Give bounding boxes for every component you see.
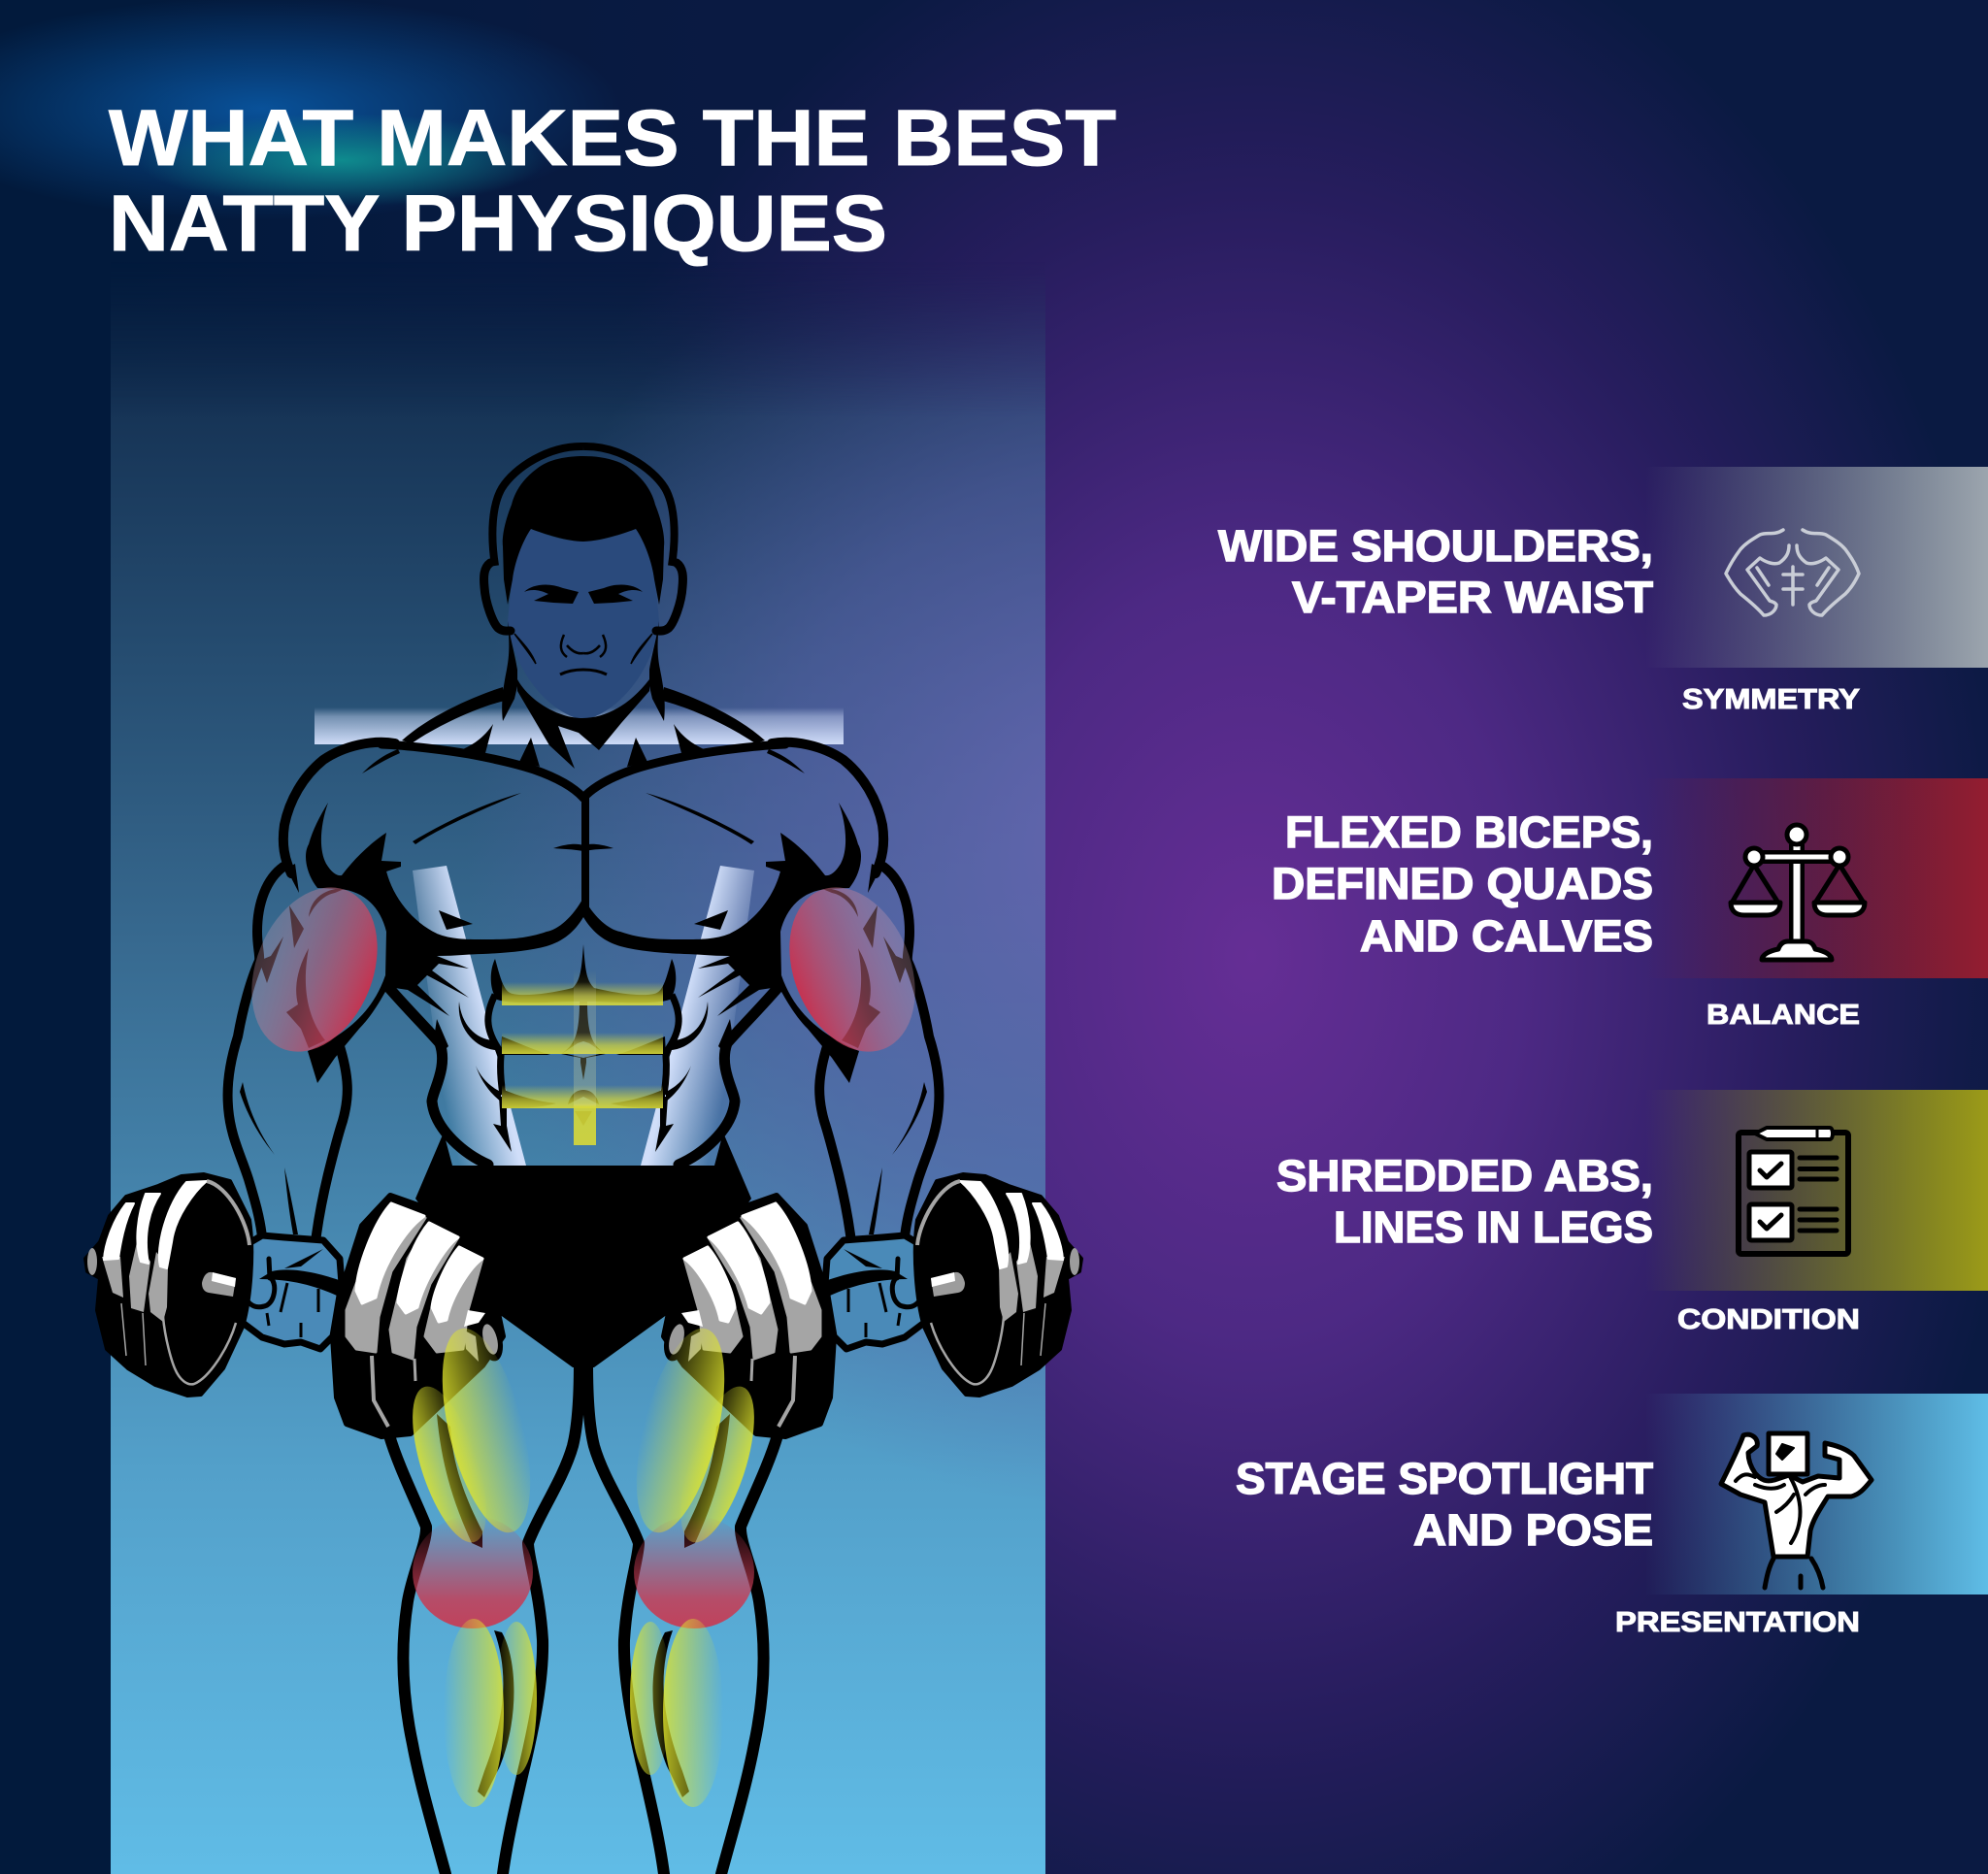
label: condition: CONDITION — [1677, 1304, 1860, 1335]
pecs, armpit and lat mass — [240, 793, 583, 1234]
highlight: biceps left — [228, 869, 401, 1070]
shorts — [415, 1133, 583, 1367]
icon: flexing bodybuilder — [1721, 1433, 1872, 1588]
highlight: biceps right — [766, 869, 939, 1070]
text: stage spotlight: AND POSE — [1413, 1505, 1653, 1555]
leg outlines — [389, 1364, 580, 1874]
facial features — [514, 585, 583, 674]
text: stage spotlight — [1236, 1454, 1653, 1555]
label: presentation: PRESENTATION — [1615, 1607, 1860, 1638]
text: flexed biceps: AND CALVES — [1360, 911, 1653, 961]
figure: bodybuilder with dumbbells — [85, 446, 1081, 1874]
text: flexed biceps: FLEXED BICEPS, — [1285, 807, 1653, 857]
panel: figure backdrop — [111, 262, 1045, 1874]
text: wide shoulders — [1218, 521, 1653, 622]
outer weight plates — [85, 1174, 251, 1396]
ear — [484, 563, 511, 631]
text: flexed biceps: DEFINED QUADS — [1272, 859, 1653, 908]
label: symmetry: SYMMETRY — [1682, 684, 1860, 715]
band: presentation — [1645, 1394, 1988, 1595]
text: stage spotlight: STAGE SPOTLIGHT — [1236, 1454, 1653, 1503]
face fill — [508, 529, 583, 720]
highlight: calves — [444, 1619, 723, 1807]
highlight: shoulder width bar — [315, 707, 844, 744]
highlight: v-taper waist stripes — [413, 866, 754, 1166]
text: flexed biceps — [1272, 807, 1653, 961]
title glow — [0, 0, 621, 220]
neck and traps — [362, 621, 540, 773]
icon: checklist clipboard — [1739, 1128, 1848, 1254]
label: balance: BALANCE — [1706, 1000, 1860, 1031]
band: condition — [1645, 1090, 1988, 1291]
title: WHAT MAKES THE BEST — [109, 94, 1116, 182]
band: symmetry — [1645, 467, 1988, 668]
quad and calf lines — [437, 1414, 514, 1797]
text: shredded abs: SHREDDED ABS, — [1276, 1151, 1653, 1200]
text: shredded abs — [1276, 1151, 1653, 1252]
title — [109, 94, 1116, 268]
text: wide shoulders: WIDE SHOULDERS, — [1218, 521, 1653, 571]
sternum line — [581, 796, 589, 917]
hair — [492, 446, 583, 605]
title: NATTY PHYSIQUES — [109, 180, 887, 268]
inner weight plates — [333, 1196, 508, 1436]
highlight: abs — [502, 970, 663, 1145]
hand gripping bar — [240, 1235, 342, 1349]
figure left half — [85, 446, 583, 1874]
text: shredded abs: LINES IN LEGS — [1334, 1202, 1653, 1252]
highlight: knees — [413, 1516, 754, 1628]
abs definition — [459, 944, 583, 1152]
icon: balance scale — [1731, 825, 1865, 960]
band: balance — [1645, 778, 1988, 978]
figure right half — [583, 446, 1081, 1874]
text: wide shoulders: V-TAPER WAIST — [1292, 573, 1653, 622]
shoulder and arm outline — [228, 742, 583, 1242]
chin and neck wedge — [517, 679, 649, 769]
icon: muscular torso — [1726, 530, 1859, 615]
highlight: quads — [397, 1320, 770, 1551]
